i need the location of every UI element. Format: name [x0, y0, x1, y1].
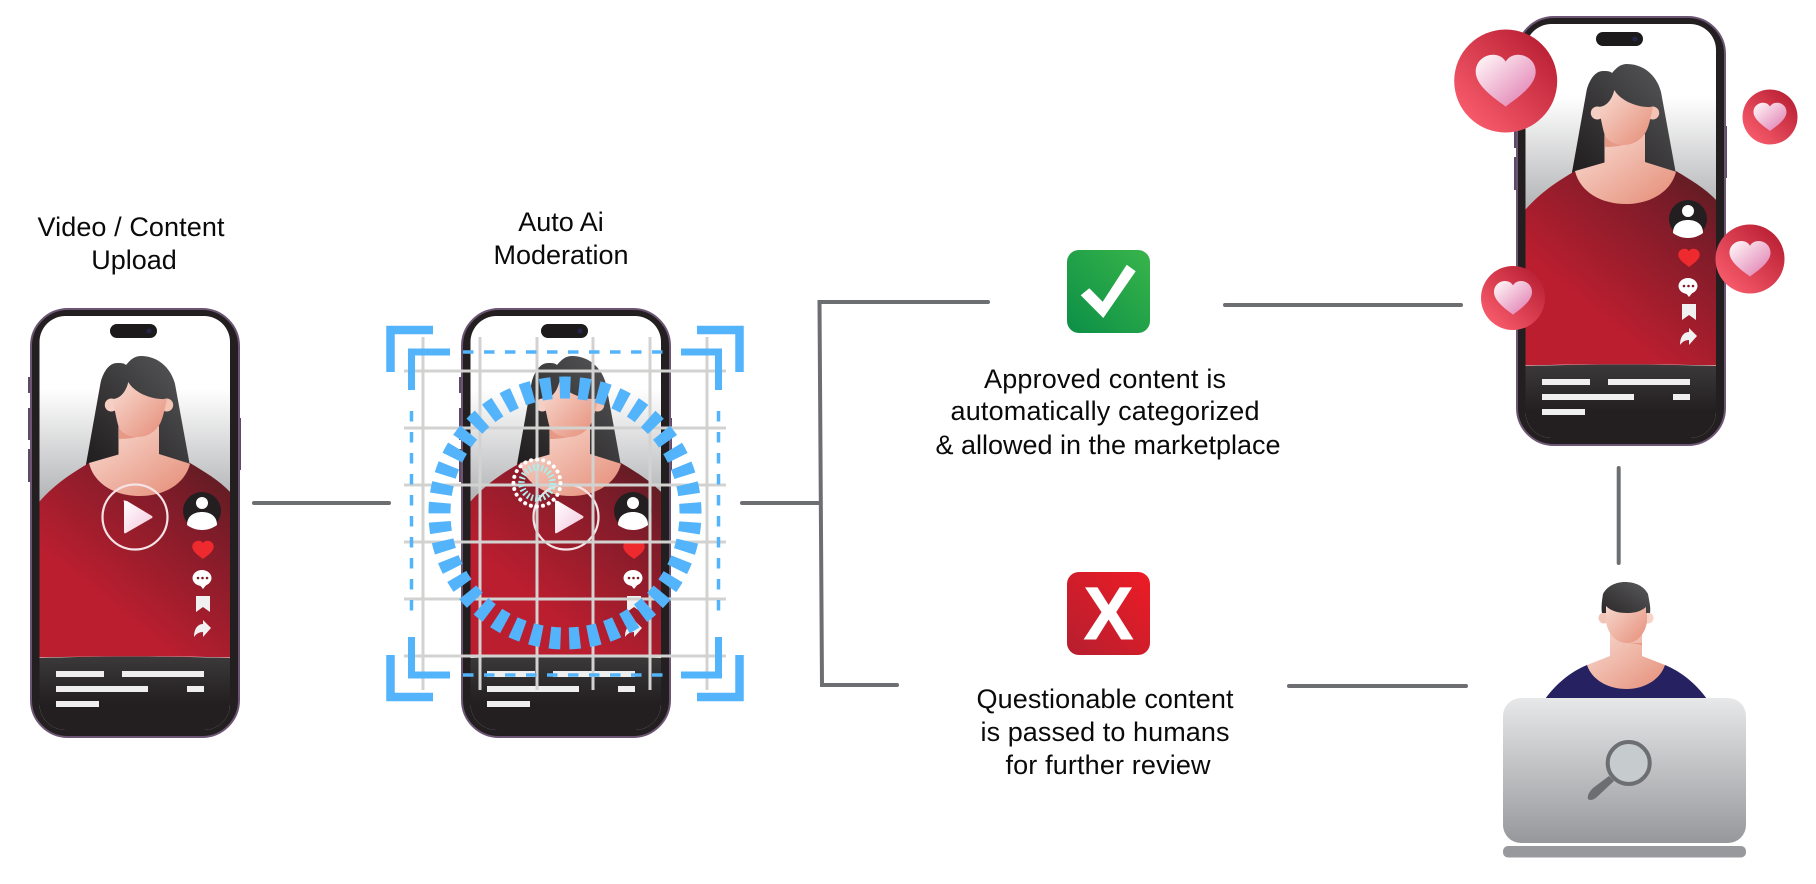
arrow: questionable to human review	[1289, 684, 1466, 688]
portrait on screen	[1525, 64, 1717, 441]
text: questionable content: Questionable content	[976, 684, 1234, 714]
phone: uploaded video	[28, 309, 241, 737]
heading: auto ai moderation: Auto Ai	[518, 207, 604, 237]
icon: right heart bubble	[1716, 224, 1784, 294]
heading: video upload: Video / Content	[38, 212, 225, 242]
scanning ring	[434, 382, 696, 644]
portrait on screen	[470, 356, 662, 733]
laptop	[1503, 698, 1746, 858]
arrow: upload to moderation	[254, 501, 389, 505]
portrait on screen	[39, 356, 231, 733]
reviewer shirt	[1545, 665, 1707, 699]
decision bracket	[820, 302, 988, 685]
reviewer head	[1598, 582, 1654, 645]
social action icons	[1669, 200, 1707, 345]
phone body	[459, 309, 672, 737]
caption lines	[487, 671, 635, 707]
camera island	[1596, 32, 1643, 46]
reviewer neck and chest	[1587, 630, 1665, 689]
text: approved content	[936, 364, 1280, 460]
text: questionable content: for further review	[1006, 750, 1211, 780]
play button	[102, 484, 168, 550]
phone body	[28, 309, 241, 737]
inner corner brackets	[412, 352, 718, 675]
laptop lid	[1503, 698, 1746, 843]
text: approved content: Approved content is	[984, 364, 1226, 394]
text: questionable content: is passed to humans	[980, 717, 1230, 747]
icon: small heart bubble	[1742, 90, 1798, 144]
icon: rejected x	[1067, 572, 1150, 655]
play button	[534, 484, 598, 550]
heading: auto ai moderation	[493, 207, 629, 270]
caption lines	[56, 671, 204, 707]
phone: under moderation	[459, 309, 672, 737]
phone: published in marketplace	[1514, 17, 1727, 445]
camera island	[110, 324, 157, 338]
text: approved content: automatically categorized	[950, 396, 1260, 426]
arrow: human review to marketplace	[1617, 468, 1621, 563]
heading: video upload: Upload	[91, 245, 177, 275]
arrow: approved to marketplace	[1225, 303, 1461, 307]
camera island	[541, 324, 588, 338]
icon: large heart bubble	[1454, 30, 1557, 132]
outer corner brackets	[390, 330, 740, 697]
caption lines	[1542, 379, 1690, 415]
scan overlay	[390, 330, 740, 697]
dashed scan frame	[412, 352, 718, 675]
icon: left heart bubble	[1481, 266, 1545, 330]
icon: approved check	[1067, 250, 1150, 333]
laptop base	[1503, 846, 1746, 858]
heading: auto ai moderation: Moderation	[493, 240, 629, 270]
text: questionable content	[976, 684, 1234, 780]
icon: rejected x: X	[1084, 572, 1133, 655]
social action icons	[614, 492, 652, 637]
heading: video upload	[38, 212, 225, 275]
icon: magnifier	[1588, 742, 1650, 800]
text: approved content: & allowed in the marketplace	[936, 430, 1280, 460]
focus point	[514, 460, 560, 506]
phone body	[1514, 17, 1727, 445]
human reviewer	[1545, 582, 1707, 699]
scan grid	[404, 337, 726, 690]
social action icons	[183, 492, 221, 637]
arrow: moderation to decision bracket	[742, 501, 820, 505]
